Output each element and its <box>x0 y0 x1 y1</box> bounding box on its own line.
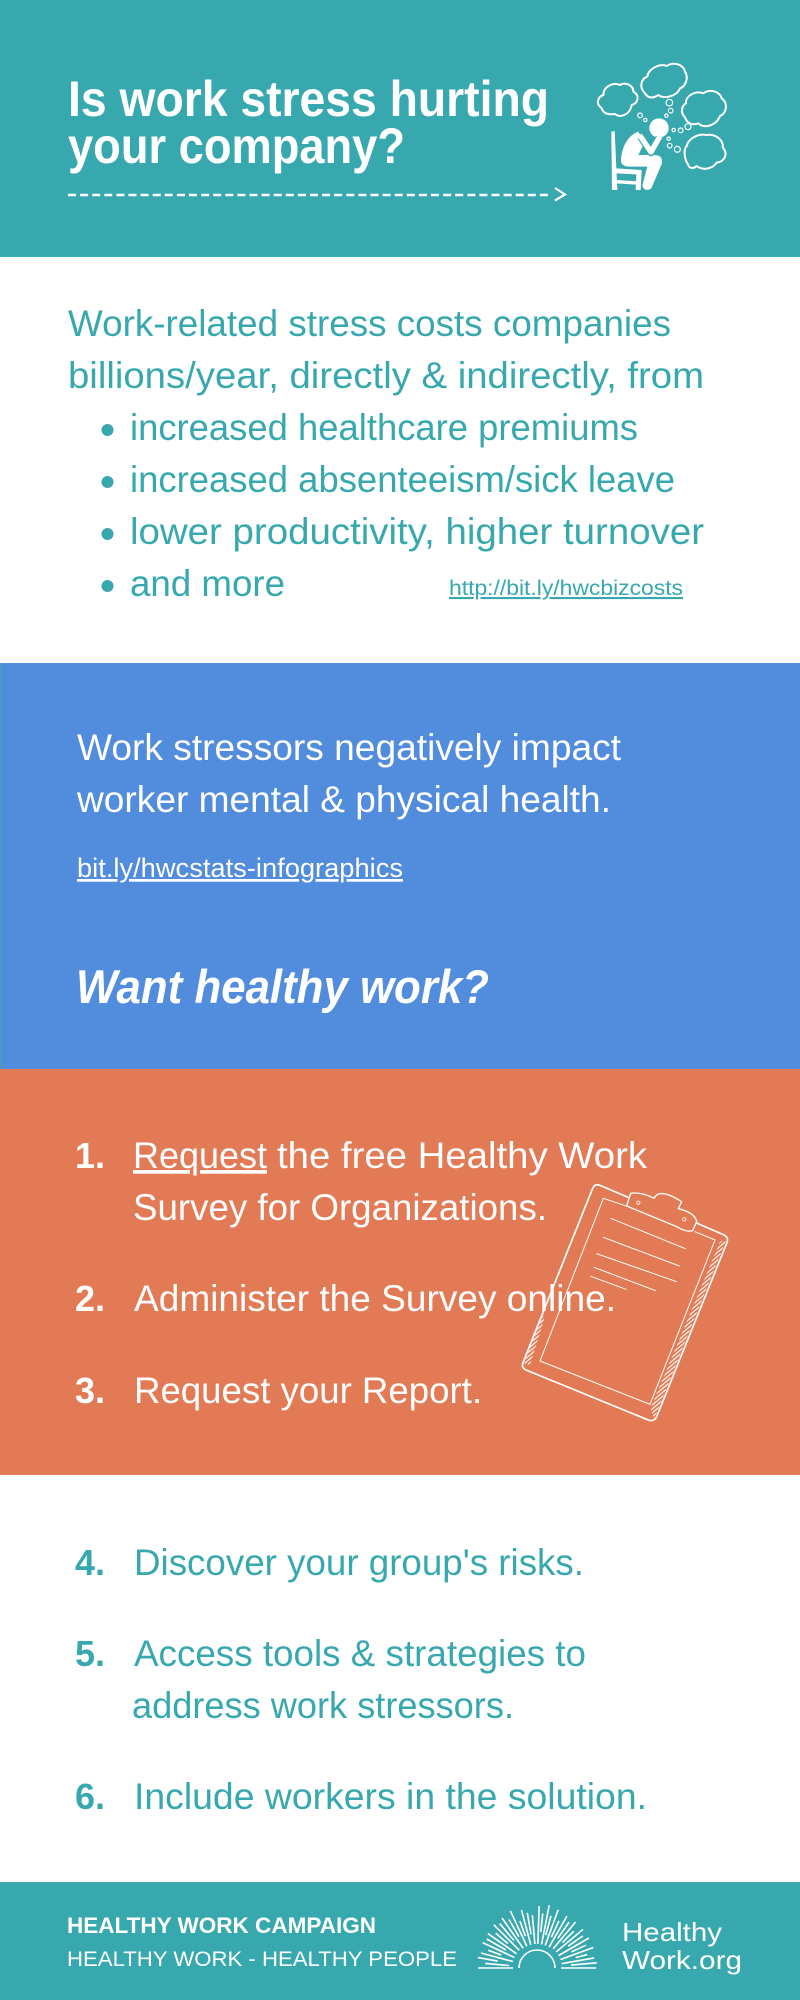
list: cost bullets: increased absenteeism/sick leave <box>130 459 675 500</box>
title: your company? <box>68 118 405 174</box>
step 5: Access tools & strategies to <box>134 1633 586 1674</box>
link: stats: bit.ly/hwcstats-infographics <box>77 853 403 883</box>
list: cost bullets: increased healthcare premiums <box>130 407 638 448</box>
step 2: 2. <box>75 1278 105 1319</box>
panel: header <box>0 0 800 257</box>
step 5: address work stressors. <box>132 1685 514 1726</box>
step 3: Request your Report. <box>134 1370 482 1411</box>
text block: intro: billions/year, directly & indirectly, from <box>68 355 704 396</box>
footer campaign text <box>67 1913 457 1971</box>
step 1: the free Healthy Work <box>277 1135 648 1176</box>
footer url: Work.org <box>622 1945 742 1975</box>
text block: stressors <box>76 727 622 820</box>
step 4: 4. <box>75 1542 105 1583</box>
footer url: Healthy <box>622 1917 722 1947</box>
footer campaign text: HEALTHY WORK CAMPAIGN <box>67 1913 376 1938</box>
step 1: 1. <box>75 1135 105 1176</box>
panel: costs of stress <box>68 303 704 604</box>
footer campaign text: HEALTHY WORK - HEALTHY PEOPLE <box>67 1948 457 1971</box>
step 1 <box>75 1135 648 1228</box>
step 5 <box>75 1633 586 1726</box>
step 3: 3. <box>75 1370 105 1411</box>
step 1: Survey for Organizations. <box>133 1187 547 1228</box>
step 5: 5. <box>75 1633 105 1674</box>
text block: stressors: worker mental & physical health. <box>76 779 611 820</box>
step 6: Include workers in the solution. <box>134 1776 647 1817</box>
icon: sunrise logo <box>478 1905 597 1968</box>
link: costs source: http://bit.ly/hwcbizcosts <box>449 577 683 600</box>
list: cost bullets: lower productivity, higher turnover <box>130 511 704 552</box>
step 1: Request <box>133 1135 268 1176</box>
text block: stressors: Work stressors negatively impact <box>77 727 622 768</box>
text block: intro <box>68 303 704 396</box>
step 4: Discover your group's risks. <box>134 1542 584 1583</box>
footer url <box>622 1917 742 1975</box>
list: cost bullets <box>102 407 704 604</box>
heading: want healthy work: Want healthy work? <box>76 960 489 1013</box>
arrow: dashed line <box>68 188 565 200</box>
panel: steps 1 to 3 <box>0 1069 800 1475</box>
icon: stressed person with thought clouds <box>598 64 726 190</box>
panel: health impact <box>0 663 800 1070</box>
step 6: 6. <box>75 1776 105 1817</box>
title <box>68 71 549 174</box>
panel: steps 4 to 6 <box>75 1542 647 1817</box>
step 2: Administer the Survey online. <box>134 1278 616 1319</box>
title: Is work stress hurting <box>68 71 549 127</box>
panel: footer <box>0 1882 800 2000</box>
icon: clipboard <box>522 1185 727 1421</box>
list: cost bullets: and more <box>130 563 285 604</box>
text block: intro: Work-related stress costs companies <box>68 303 671 344</box>
